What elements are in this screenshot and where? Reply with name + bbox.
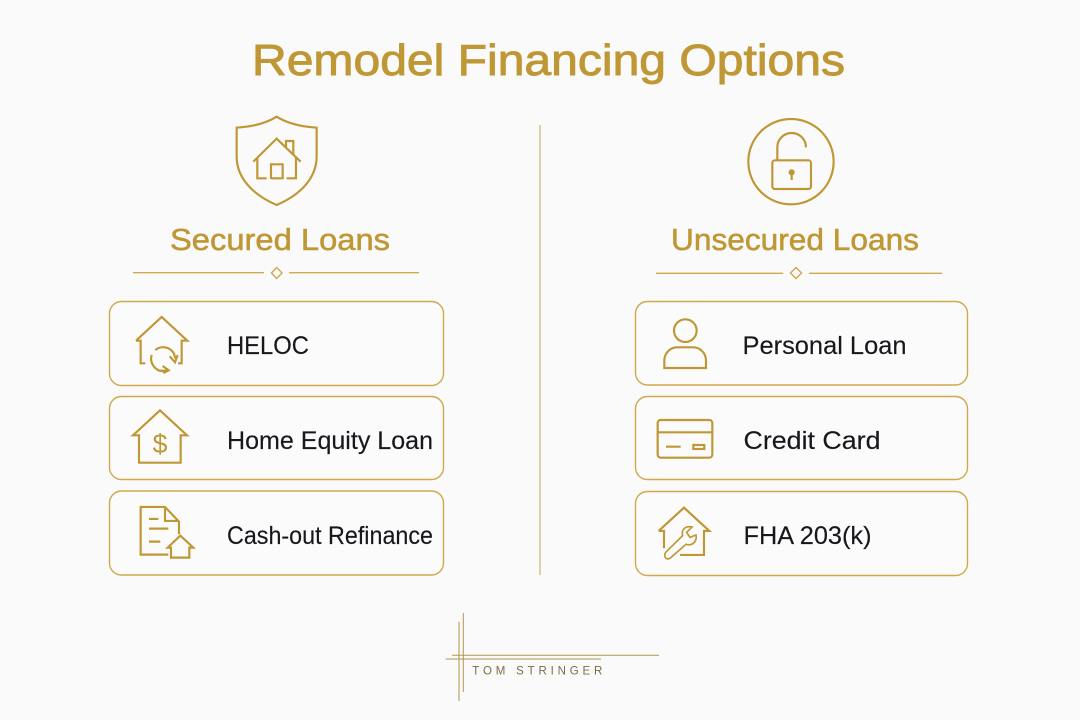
label: HELOC: HELOC	[227, 332, 309, 360]
card: credit card	[636, 396, 968, 480]
card: HELOC	[110, 302, 444, 386]
panel: unsecured loans	[636, 119, 968, 575]
icon: house with dollar: $	[153, 429, 168, 459]
icon: shield with house	[237, 117, 317, 205]
card: FHA 203(k)	[636, 492, 968, 576]
icon: document with house	[141, 507, 193, 558]
label: personal loan: Personal Loan	[742, 332, 906, 360]
label: home equity loan: Home Equity Loan	[227, 427, 433, 455]
title: Remodel Financing Options	[252, 36, 845, 85]
column divider	[539, 125, 541, 575]
logo: Tom Stringer	[446, 613, 659, 701]
heading: secured loans: Secured Loans	[170, 222, 390, 257]
icon: person	[664, 319, 706, 368]
heading ornament	[656, 268, 942, 278]
icon: house with wrench	[659, 508, 709, 559]
label: credit card: Credit Card	[744, 427, 880, 455]
heading: unsecured loans: Unsecured Loans	[671, 222, 919, 257]
label: cash-out refinance: Cash-out Refinance	[227, 522, 433, 550]
card: personal loan	[636, 302, 968, 385]
card: home equity loan	[110, 396, 444, 480]
heading ornament	[133, 268, 419, 278]
icon: credit card	[658, 420, 712, 458]
icon: house with cycle arrows	[136, 317, 187, 373]
panel: secured loans	[110, 117, 444, 575]
card: cash-out refinance	[110, 491, 444, 575]
label: FHA 203(k): FHA 203(k)	[744, 522, 872, 550]
icon: house with dollar	[133, 410, 187, 463]
icon: open padlock in circle	[748, 119, 834, 204]
logo: Tom Stringer: TOM STRINGER	[472, 666, 602, 678]
